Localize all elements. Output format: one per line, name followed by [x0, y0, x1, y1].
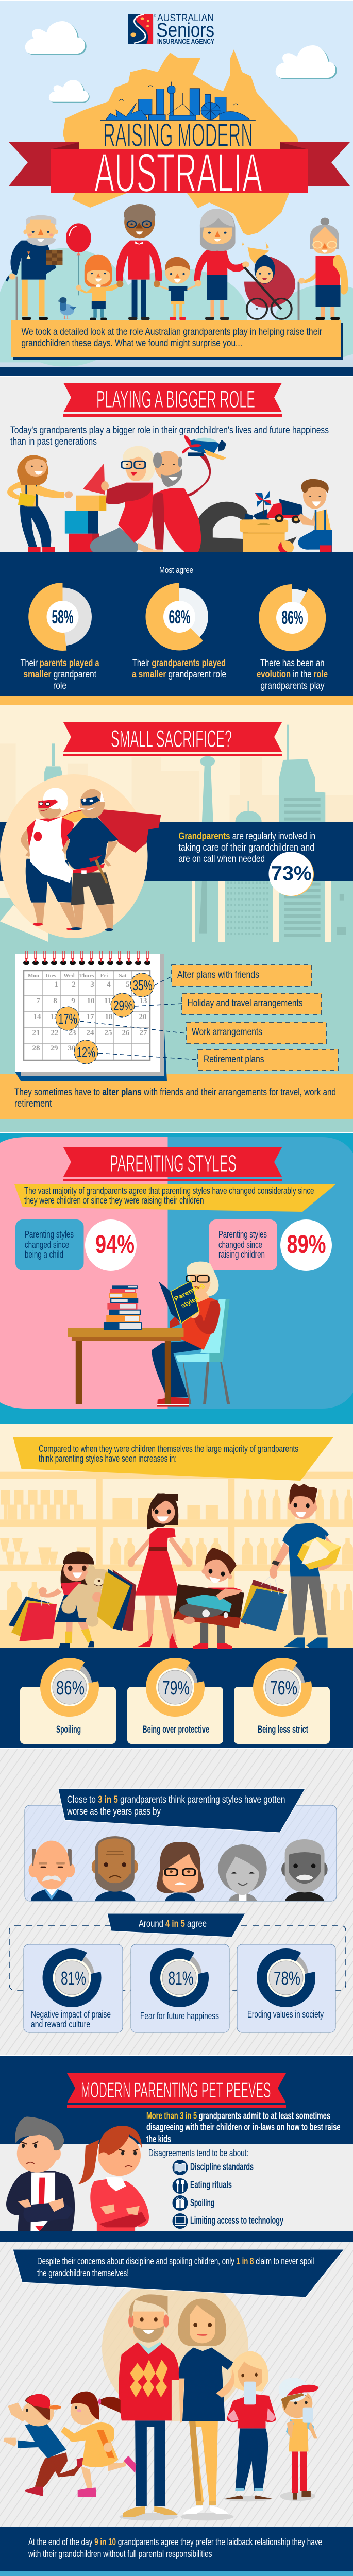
calendar: Wed: [63, 973, 75, 979]
toy blocks: [65, 463, 106, 552]
backdrop circle: parents: [102, 2275, 248, 2421]
logo: Australian Seniors Insurance Agency: AUSTRALIAN: [157, 13, 214, 24]
label: parents played a smaller role: Their parents played a: [21, 658, 99, 669]
calendar: 17: [87, 1013, 94, 1021]
badge: 12%: 12%: [77, 1044, 95, 1060]
logo: Australian Seniors Insurance Agency: [128, 13, 214, 45]
navy divider: [0, 367, 353, 376]
running girl: [61, 2392, 136, 2497]
cloud left small: [49, 80, 90, 103]
grandfather holding toy plane: [152, 435, 252, 553]
calendar: 15: [51, 1013, 58, 1021]
stat circle: 73%: 73%: [271, 862, 312, 885]
heading: Parenting styles: [63, 1147, 282, 1181]
heading: Playing a bigger role: [63, 383, 282, 417]
illustration: superhero grandparents: [0, 774, 161, 938]
father in argyle sweater: [119, 2294, 179, 2517]
donut: 76%: 76%: [270, 1677, 297, 1699]
text: disagreements tend to be about: Disagreements tend to be about:: [148, 2148, 248, 2158]
book: parenting styles: styles: [179, 1295, 201, 1309]
book: parenting styles: Parenting: [172, 1282, 206, 1302]
callout: vast majority: [14, 1184, 335, 1212]
mother in red dress: [128, 1493, 192, 1648]
stat: changed since being a child: [15, 1219, 137, 1271]
boy kneeling with truck: [298, 479, 332, 553]
card: being over protective: Being over protective: [142, 1724, 209, 1735]
mother with clipboard: [7, 455, 73, 552]
father with gift: [269, 1483, 341, 1648]
calendar: 2: [72, 980, 76, 989]
cape: [62, 809, 161, 853]
calendar: 30: [68, 1044, 75, 1053]
teen girl with phone: [216, 2351, 276, 2499]
callout: despite their concerns: [13, 2249, 344, 2421]
card: fear for future happiness: [131, 1944, 229, 2032]
donut: 81%: 81%: [168, 1968, 194, 1989]
calendar: 27: [139, 1029, 147, 1037]
donut: 81%: 81%: [61, 1968, 86, 1989]
section background: playing a bigger role: [0, 377, 353, 552]
girl with orange hair: [76, 255, 123, 320]
stat: changed since raising children: [209, 1219, 332, 1271]
stack of books: [104, 1285, 142, 1330]
map of Australia: [63, 49, 298, 235]
item: eating rituals: Eating rituals: [190, 2180, 232, 2191]
section background: shop shelves: [0, 1424, 353, 1648]
card: spoiling: Spoiling: [56, 1724, 81, 1735]
callout: compared to when they were children: think parenting styles have seen increases in:: [39, 1453, 177, 1464]
callout: despite their concerns: Despite their concerns about discipline and spoiling children, only 1 in 8 claim to never spoil: [37, 2256, 314, 2266]
badge: 35%: 35%: [133, 977, 153, 993]
illustration: angry couple: [6, 2116, 149, 2231]
card: eroding values: [237, 1944, 335, 2032]
calendar: 1: [54, 980, 58, 989]
calendar: Fri: [100, 973, 108, 979]
intro text: bigger role: [10, 425, 329, 447]
panel: nine in ten: with their grandchildren without full parental responsibilities: [28, 2549, 212, 2559]
callout: compared to when they were children: [13, 1437, 334, 1481]
calendar: 8: [53, 997, 57, 1005]
label: evolution in the role: grandparents play: [261, 681, 325, 691]
card: eroding values: Eroding values in society: [247, 2009, 324, 2020]
grandmother with glasses: [90, 446, 163, 554]
card: being less strict: [234, 1663, 330, 1744]
calendar: 11: [104, 997, 111, 1005]
navy band: [0, 822, 353, 881]
callouts: calendar percentages and labels: [56, 965, 338, 1071]
grandmother: [152, 1262, 221, 1407]
item: discipline standards: [172, 2160, 254, 2175]
illustration: five grandparent faces: [28, 1836, 328, 1901]
label: parents played a smaller role: role: [53, 681, 66, 691]
label: parents played a smaller role: [21, 658, 99, 691]
pram with baby: [244, 255, 295, 319]
calendar: 23: [68, 1029, 76, 1037]
teddy bear: [61, 1565, 116, 1627]
balloon: [66, 223, 91, 295]
box: alter plans with friends: [172, 965, 312, 986]
label: grandparents played a smaller role: Their grandparents played: [132, 658, 226, 669]
illustration: family of grandparents and children: [7, 204, 348, 320]
donut: 81%: [48, 1954, 96, 2002]
stat: changed since raising children: 89%: [287, 1230, 326, 1259]
section background: everybody wins: [0, 2571, 353, 2576]
panel: increases: [0, 1648, 353, 1748]
section background: small sacrifice city: [0, 705, 353, 1133]
badge: 29%: [111, 993, 135, 1017]
calendar: 18: [105, 1013, 112, 1021]
skyline illustration: [100, 82, 256, 120]
panel: most agree: Most agree: [159, 565, 193, 575]
card: negative impact of praise: and reward culture: [31, 2019, 90, 2029]
item: limiting access to technology: [172, 2213, 283, 2229]
text: more than 3 in 5: [146, 2111, 340, 2145]
hero hills: [0, 248, 353, 367]
calendar: 28: [32, 1044, 40, 1053]
grandfather superhero: [62, 789, 118, 931]
calendar: 26: [122, 1029, 130, 1037]
boy: [154, 257, 201, 320]
calendar: 20: [139, 1013, 146, 1021]
calendar: 29: [51, 1044, 58, 1053]
label: evolution in the role: There has been an: [260, 658, 325, 669]
intro text: bigger role: than in past generations: [10, 436, 97, 447]
calendar: 24: [87, 1029, 94, 1037]
illustration: parents and grandchildren: [4, 2294, 318, 2520]
donut: 79%: 79%: [162, 1677, 190, 1699]
shopping bags mother: [97, 1569, 136, 1631]
calendar: 5: [126, 980, 130, 989]
logo: Australian Seniors Insurance Agency: Seniors: [157, 20, 214, 41]
grandfather in red sweater: [116, 204, 162, 320]
grandmother in navy skirt: [194, 209, 249, 320]
box: retirement plans: [198, 1049, 338, 1071]
grandmother with bun and cane: [298, 218, 348, 320]
grandmother superhero: [21, 788, 75, 930]
badge: 17%: [56, 1007, 79, 1030]
calendar: 4: [107, 980, 111, 989]
box: retirement plans: Retirement plans: [204, 1054, 264, 1065]
heading: Modern parenting pet peeves: [67, 2073, 286, 2108]
illustration: grandparents playing with grandchildren: [7, 435, 332, 554]
section background: parenting styles: [0, 1132, 353, 1424]
card: negative impact of praise: Negative impact of praise: [31, 2009, 111, 2020]
cloud right: [276, 45, 337, 79]
pie chart: 58%: 58%: [52, 606, 73, 628]
item: spoiling: Spoiling: [190, 2198, 214, 2209]
heading: Small sacrifice: SMALL SACRIFICE?: [111, 725, 232, 752]
calendar: 13: [139, 997, 147, 1005]
logo: Australian Seniors Insurance Agency: ®: [154, 14, 156, 18]
text: altering plans: [14, 1087, 336, 1109]
face 3: [157, 1842, 204, 1901]
box: holiday and travel arrangements: [182, 993, 322, 1014]
pie chart: 68%: 68%: [169, 606, 191, 628]
running boy: [4, 2394, 85, 2496]
text: grandparents on call: [178, 831, 315, 865]
boy in red cap with phone: [279, 2378, 318, 2500]
cloud left large: [25, 21, 87, 55]
calendar: 21: [32, 1029, 40, 1037]
pie chart: 86%: [259, 584, 326, 651]
shopping bags girl: [8, 1590, 57, 1641]
panel: faces: [25, 1805, 337, 1901]
stat: changed since raising children: changed since: [218, 1240, 262, 1250]
pie chart: 86%: 86%: [281, 607, 303, 628]
item: limiting access to technology: Limiting access to technology: [190, 2215, 283, 2226]
book: parenting styles: [159, 1281, 206, 1323]
grandfather with cane and chess board: [7, 215, 62, 320]
calendar: 7: [36, 997, 40, 1005]
toys: pinwheel, truck and ball: [255, 491, 303, 554]
text: altering plans: retirement: [14, 1098, 52, 1109]
donut: 79%: [151, 1663, 199, 1711]
illustration: grandmother reading at table: [68, 1262, 230, 1407]
panel: most agree: [0, 552, 353, 705]
donut: 86%: [45, 1663, 94, 1711]
card: being over protective: [127, 1663, 223, 1744]
stat: changed since raising children: Parenting styles: [218, 1229, 267, 1240]
pigeon: [58, 297, 77, 319]
face 1: [28, 1841, 75, 1901]
stat circle: 73%: [269, 852, 314, 896]
donut: 81%: [155, 1954, 204, 2002]
badge: 17%: 17%: [58, 1011, 77, 1027]
panel: nine in ten: [0, 2527, 353, 2571]
label: evolution in the role: evolution in the role: [257, 669, 328, 680]
text: grandparents on call: Grandparents are regularly involved in: [178, 831, 315, 842]
pie chart: 58%: [28, 583, 92, 651]
calendar: 25: [104, 1029, 112, 1037]
heading: Small sacrifice: [63, 722, 282, 756]
item: discipline standards: Discipline standards: [190, 2162, 254, 2173]
stat: changed since raising children: raising children: [218, 1249, 265, 1260]
logo: Australian Seniors Insurance Agency: INSURANCE AGENCY: [157, 37, 214, 45]
callout: vast majority: they were children or since they were raising their children: [24, 1195, 204, 1206]
text: more than 3 in 5: the kids: [146, 2134, 171, 2145]
card: spoiling: [20, 1663, 116, 1744]
box: work arrangements: Work arrangements: [192, 1027, 262, 1038]
angry man: [6, 2116, 75, 2231]
donut: 78%: [262, 1954, 310, 2002]
callout: around 4 in 5 agree: Around 4 in 5 agree: [139, 1919, 207, 1929]
boy with toy car box: [173, 1548, 244, 1649]
item: spoiling: [172, 2195, 214, 2211]
calendar: 10: [87, 997, 95, 1005]
shopping bags father: [241, 1573, 287, 1631]
calendar: 3: [90, 980, 94, 989]
callout: close to 3 in 5: worse as the years pass by: [66, 1806, 161, 1817]
item: eating rituals: [172, 2178, 232, 2194]
girl with teddy bear: [39, 1551, 116, 1648]
calendar: 14: [33, 1013, 41, 1021]
pie chart: 68%: [145, 583, 208, 650]
illustration: family shopping: [8, 1483, 341, 1649]
callout: close to 3 in 5: Close to 3 in 5 grandparents think parenting styles have gotten: [67, 1794, 285, 1805]
stat: changed since being a child: being a child: [25, 1249, 63, 1260]
donut: 78%: 78%: [274, 1968, 300, 1989]
stat: changed since being a child: 94%: [95, 1230, 135, 1259]
label: parents played a smaller role: smaller grandparent: [24, 669, 97, 680]
angry woman: [78, 2126, 149, 2231]
map: Tasmania fragment: [242, 242, 269, 264]
box: alter plans with friends: Alter plans with friends: [177, 970, 259, 980]
calendar: [15, 951, 167, 1081]
chair: [176, 1299, 230, 1404]
intro card: [11, 320, 343, 360]
calendar: Thurs: [79, 973, 94, 979]
donut: 76%: [258, 1663, 307, 1711]
dashed frame: around 4 in 5: [9, 1925, 346, 1990]
callout: around 4 in 5 agree: [107, 1913, 245, 1937]
mother in navy top: [178, 2299, 234, 2514]
calendar: Tues: [45, 973, 57, 979]
label: grandparents played a smaller role: a smaller grandparent role: [132, 669, 226, 680]
badge: 29%: 29%: [113, 997, 133, 1013]
calendar: 9: [71, 997, 75, 1005]
donut: 86%: 86%: [56, 1677, 85, 1699]
calendar: Mon: [28, 973, 39, 979]
orange band: [0, 1074, 353, 1119]
section background: hatched grey: [0, 1749, 353, 2055]
hero background: [0, 0, 353, 367]
stat: changed since being a child: changed since: [25, 1240, 69, 1250]
calendar: 22: [51, 1029, 59, 1037]
card: being less strict: Being less strict: [258, 1724, 308, 1735]
box: holiday and travel arrangements: Holiday and travel arrangements: [188, 998, 303, 1009]
box: work arrangements: [187, 1022, 326, 1044]
face 5: [281, 1839, 328, 1901]
heading: Parenting styles: PARENTING STYLES: [110, 1150, 237, 1177]
text: grandparents on call: taking care of their grandchildren and: [178, 842, 314, 853]
label: grandparents played a smaller role: [132, 658, 226, 680]
callout: close to 3 in 5: [58, 1789, 305, 1833]
stat: changed since being a child: Parenting styles: [25, 1229, 74, 1240]
text: grandparents on call: are on call when needed: [178, 854, 265, 865]
card: negative impact of praise: [24, 1944, 123, 2032]
section background: teal lower city: [0, 881, 353, 1133]
intro card: grandchildren these days. What we found might surprise you...: [22, 338, 242, 349]
section background: pet peeves: [0, 2055, 353, 2527]
badge: 35%: [130, 973, 154, 997]
toy plane: [182, 435, 226, 460]
callout: despite their concerns: the grandchildren themselves!: [37, 2268, 129, 2278]
label: evolution in the role: [257, 658, 328, 691]
face 2: [92, 1836, 138, 1901]
face 4: [218, 1844, 267, 1901]
toy box: [240, 509, 288, 553]
calendar: Sat: [119, 973, 127, 979]
table: [68, 1328, 183, 1404]
badge: 12%: [74, 1040, 98, 1064]
card: fear for future happiness: Fear for future happiness: [140, 2011, 219, 2021]
